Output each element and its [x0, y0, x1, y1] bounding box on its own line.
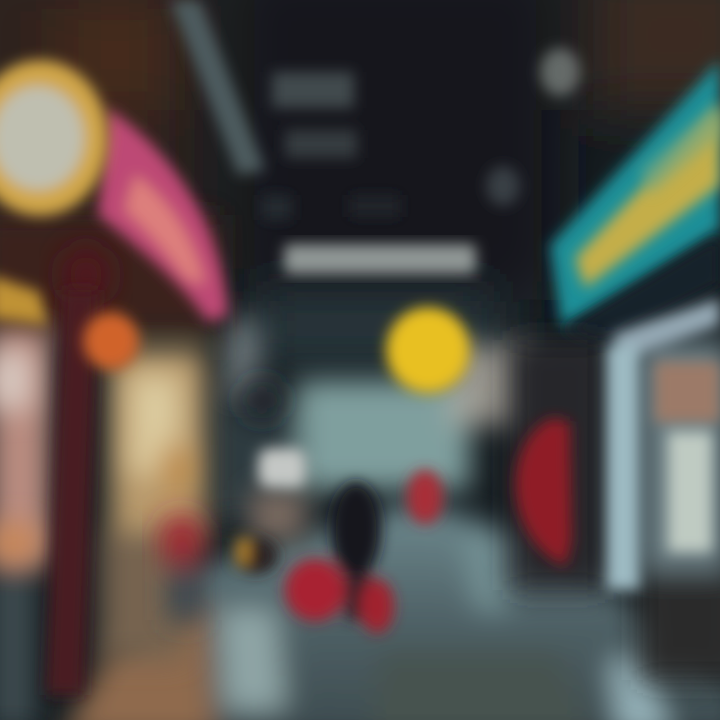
red arched doorway	[515, 418, 572, 566]
background: ceiling and upper walls	[0, 0, 720, 360]
shopper with white top	[242, 380, 305, 540]
yellow round sign	[386, 307, 470, 393]
distant shopper in red	[407, 470, 443, 524]
white top	[234, 448, 306, 574]
orange lantern	[83, 312, 139, 370]
shopper with red bag on the left	[160, 514, 204, 620]
round yellow shop sign	[0, 60, 108, 216]
ceiling beams and lights	[170, 0, 580, 220]
right storefront	[510, 298, 720, 680]
left storefront: warm lit shop	[0, 215, 220, 720]
dark red pillar	[60, 245, 112, 305]
floor	[60, 500, 720, 720]
white hanging sign strip	[284, 244, 476, 274]
pillar shaft	[46, 290, 98, 695]
pink awning	[98, 108, 228, 322]
middle distance: pale teal end of hall	[210, 320, 530, 520]
right teal sign	[550, 60, 720, 345]
central shopper with red bags	[285, 482, 394, 633]
